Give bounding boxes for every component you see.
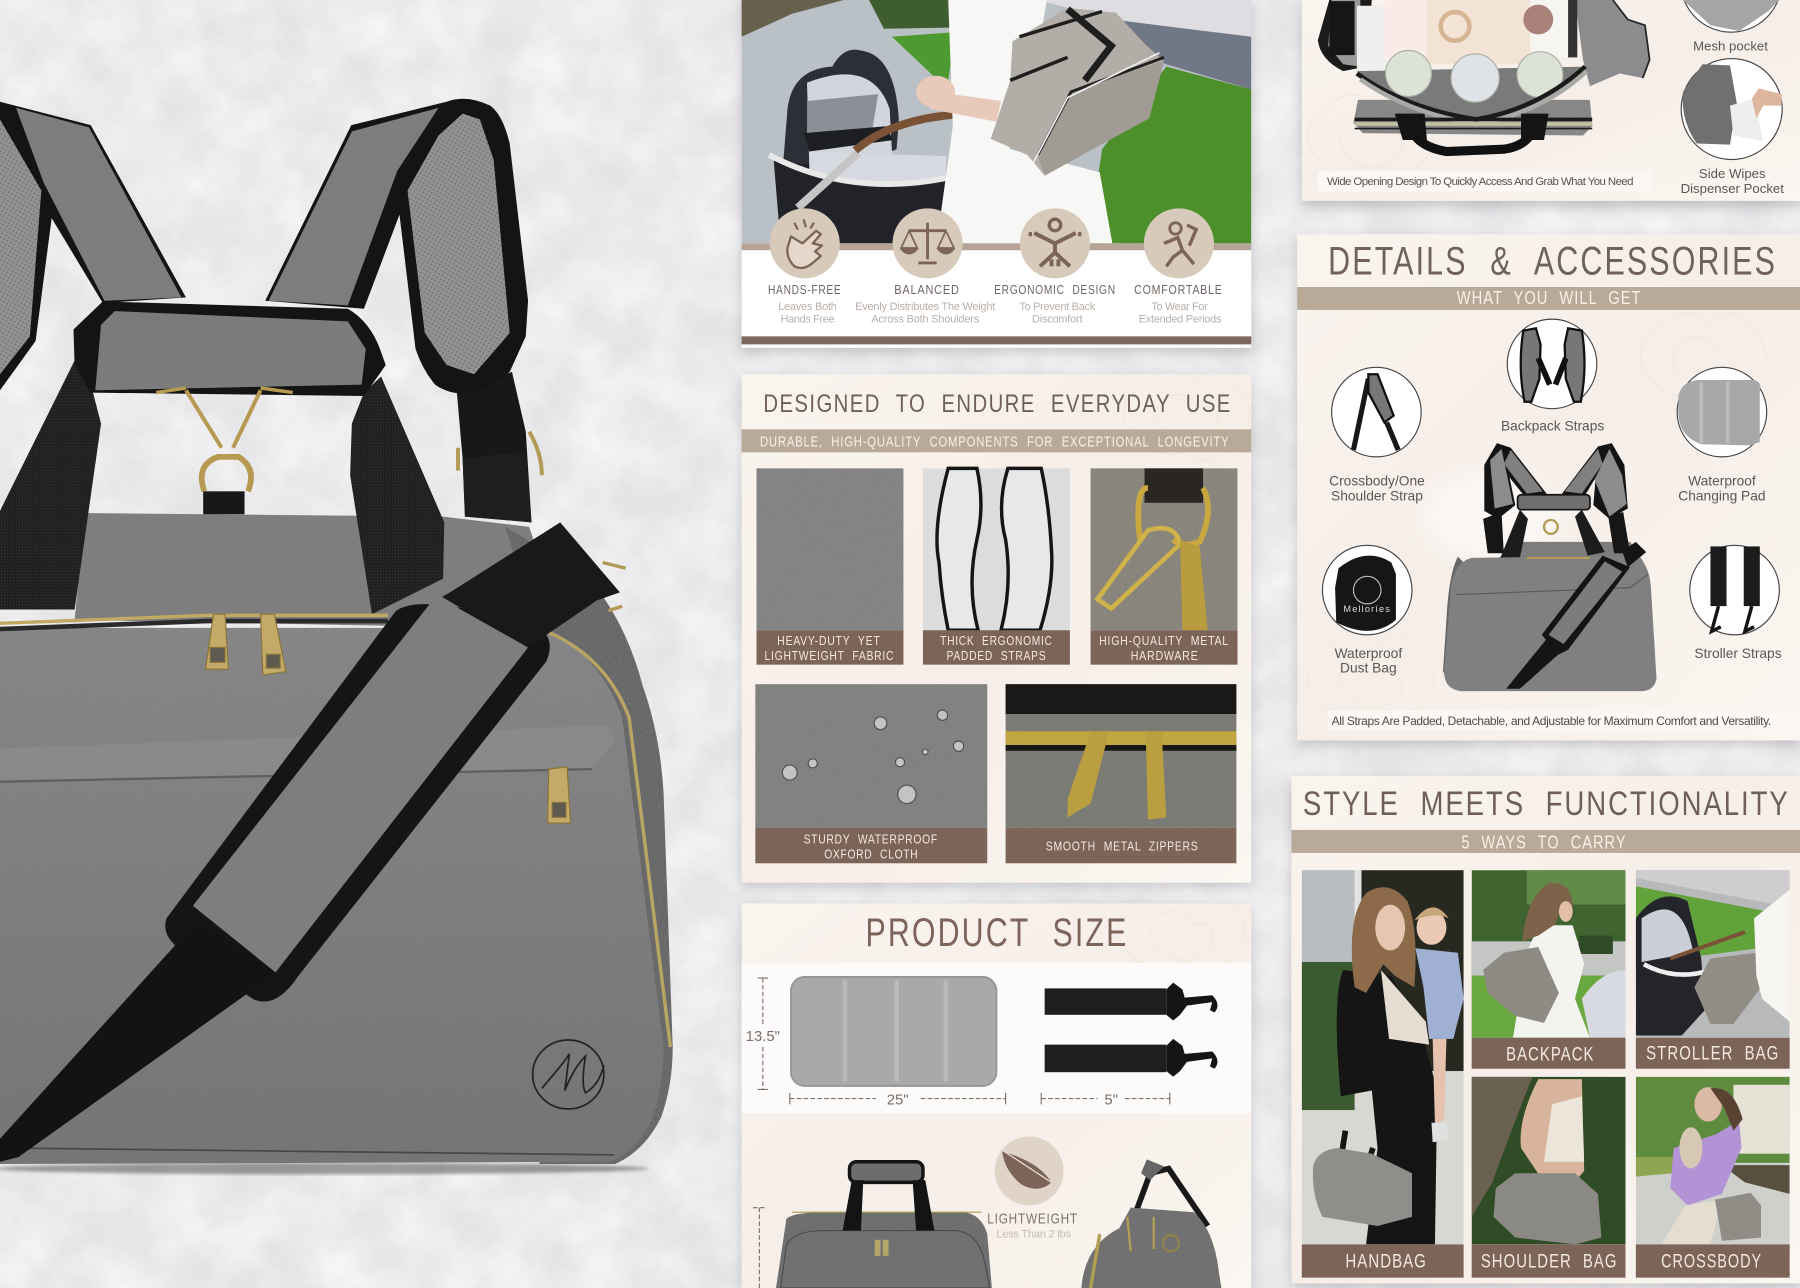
tile: backpack photo: BACKPACK <box>1506 1045 1595 1066</box>
dimension: height: 13.5" <box>746 1028 780 1045</box>
accessory: crossbody strap <box>1329 367 1425 504</box>
lightweight label: Less Than 2 lbs <box>996 1228 1072 1240</box>
stroller straps <box>1045 983 1217 1077</box>
note strip <box>1328 711 1790 730</box>
lightweight label <box>987 1211 1078 1240</box>
tile: waterproof cloth: STURDY WATERPROOF <box>804 832 938 847</box>
dimension: width: 25" <box>887 1091 909 1108</box>
heading: PRODUCT SIZE <box>866 910 1128 955</box>
webbing upper <box>442 522 620 647</box>
accessory: dust bag: Waterproof <box>1335 646 1402 661</box>
subheading band: WHAT YOU WILL GET <box>1457 287 1642 308</box>
feature: hands-free text: Hands Free <box>781 314 835 326</box>
mesh pocket circle <box>1681 0 1782 54</box>
changing pad <box>791 977 996 1086</box>
webbing lower <box>0 921 276 1162</box>
accessory: changing pad: Changing Pad <box>1678 489 1766 504</box>
panel: designed to endure <box>742 370 1251 886</box>
right shoulder strap <box>265 99 542 522</box>
ground shadow <box>0 1163 649 1174</box>
tile: metal hardware: HARDWARE <box>1131 648 1198 663</box>
tile: crossbody photo: CROSSBODY <box>1661 1251 1762 1272</box>
right handle strap <box>350 377 444 614</box>
zip <box>1527 557 1590 559</box>
zipper pulls <box>205 614 571 823</box>
accessory: stroller straps: Stroller Straps <box>1694 646 1782 661</box>
bag front view <box>776 1162 992 1288</box>
tile: waterproof cloth: OXFORD CLOTH <box>824 847 918 862</box>
tile: backpack photo <box>1472 870 1626 1069</box>
feature: balanced text: Across Both Shoulders <box>871 314 980 326</box>
dimension: strap length: 5" <box>1104 1091 1118 1108</box>
gold zipper top line <box>0 615 388 623</box>
tile: metal hardware: HIGH-QUALITY METAL <box>1099 633 1229 648</box>
tile: metal zippers <box>1006 684 1236 863</box>
tile: padded straps: THICK ERGONOMIC <box>940 633 1053 648</box>
dimension: width <box>790 1091 1006 1108</box>
webbing <box>1506 542 1646 689</box>
note strip: All Straps Are Padded, Detachable, and Adjustable for Maximum Comfort and Versatility. <box>1332 714 1771 728</box>
feature: hands-free text <box>768 283 841 326</box>
subheading band: 5 WAYS TO CARRY <box>1461 831 1627 852</box>
panel: wide opening interior <box>1302 0 1800 207</box>
pad outer <box>1542 556 1630 654</box>
top carry handle <box>73 301 386 396</box>
tile: crossbody photo <box>1636 1077 1790 1278</box>
tile: stroller bag photo <box>1636 870 1790 1069</box>
dark zipper shadow <box>0 621 388 629</box>
tile: handbag photo <box>1302 870 1464 1278</box>
rear side gusset <box>505 527 673 1164</box>
feature: comfortable text <box>1134 283 1223 326</box>
side gusset <box>1443 557 1464 689</box>
black tab <box>203 491 245 514</box>
wipes pocket circle <box>1681 59 1784 196</box>
feature: balanced text <box>855 283 995 326</box>
accessory: dust bag <box>1322 545 1412 676</box>
heading: DESIGNED TO ENDURE EVERYDAY USE <box>763 390 1232 418</box>
feature: balanced text: BALANCED <box>894 283 960 297</box>
left handle strap <box>0 360 101 610</box>
handle <box>1518 495 1590 510</box>
accessory: backpack straps: Backpack Straps <box>1501 418 1604 433</box>
feather badge <box>995 1136 1064 1205</box>
icon: comfortable <box>1144 208 1214 278</box>
dimension: bag height <box>753 1208 766 1288</box>
feature: ergonomic text <box>994 283 1116 326</box>
gold carabiner hardware <box>156 388 293 491</box>
accessory: dust bag: Dust Bag <box>1340 661 1397 676</box>
feature: balanced text: Evenly Distributes The Weight <box>855 301 995 313</box>
tile: fabric: LIGHTWEIGHT FABRIC <box>765 648 894 663</box>
panel: style meets functionality <box>1291 776 1800 1288</box>
subheading band: DURABLE, HIGH-QUALITY COMPONENTS FOR EXCEPTIONAL LONGEVITY <box>760 434 1229 451</box>
feature: comfortable text: To Wear For <box>1151 301 1208 313</box>
accessory: changing pad: Waterproof <box>1688 474 1756 489</box>
accessory: crossbody strap: Crossbody/One <box>1329 474 1425 489</box>
accessory: backpack straps <box>1501 319 1604 433</box>
back panel of bag <box>75 513 563 629</box>
subheading band <box>1291 830 1800 853</box>
bag side view <box>1081 1159 1221 1288</box>
left shoulder strap <box>0 102 186 390</box>
wipes pocket circle: Dispenser Pocket <box>1681 181 1784 196</box>
panel: product size <box>742 887 1251 1288</box>
feature: comfortable text: COMFORTABLE <box>1134 283 1223 297</box>
tile: padded straps: PADDED STRAPS <box>946 648 1046 663</box>
icon: ergonomic design <box>1020 208 1090 278</box>
flap seam <box>1456 574 1648 595</box>
taupe band <box>742 243 1251 250</box>
pocket shadow <box>0 769 592 782</box>
gold rivet <box>603 562 626 611</box>
feature: ergonomic text: To Prevent Back <box>1019 301 1096 313</box>
center product bag <box>1443 443 1656 691</box>
caption strip: Wide Opening Design To Quickly Access And Grab What You Need <box>1327 176 1634 188</box>
accessory: dust bag: Melloríes <box>1343 604 1391 614</box>
tile: shoulder bag photo <box>1472 1077 1626 1278</box>
icon: hands-free <box>770 208 840 278</box>
carabiner <box>1544 520 1558 534</box>
icon: balanced scales <box>893 208 963 278</box>
right edge gold zipper <box>546 631 670 1047</box>
feature: comfortable text: Extended Periods <box>1139 314 1222 326</box>
accessory: crossbody strap: Shoulder Strap <box>1331 489 1423 504</box>
open bag photo <box>1318 0 1650 152</box>
right shoulder loop <box>1561 443 1628 519</box>
tile: metal zippers: SMOOTH METAL ZIPPERS <box>1046 839 1198 854</box>
pocket seam <box>0 1148 614 1155</box>
front pocket flap <box>0 726 615 781</box>
subheading band <box>1297 287 1800 310</box>
lifestyle photo <box>742 0 1252 244</box>
tile: shoulder bag photo: SHOULDER BAG <box>1481 1251 1617 1272</box>
dimension: strap length <box>1041 1091 1170 1108</box>
lightweight label: LIGHTWEIGHT <box>987 1211 1078 1228</box>
tile: metal hardware <box>1091 468 1237 665</box>
dimension: height <box>746 978 780 1089</box>
crossbody pad fabric <box>193 596 528 972</box>
tile: padded straps <box>923 468 1070 665</box>
feature: ergonomic text: ERGONOMIC DESIGN <box>994 283 1116 297</box>
subheading band <box>742 429 1251 452</box>
white dimensions band <box>742 963 1251 1114</box>
feature: hands-free text: Leaves Both <box>778 301 837 313</box>
hero product: diaper bag <box>0 99 673 1174</box>
feature: hands-free text: HANDS-FREE <box>768 283 841 297</box>
body <box>1444 556 1656 691</box>
mesh pocket circle: Mesh pocket <box>1693 39 1768 54</box>
tile: waterproof cloth <box>755 684 987 863</box>
left shoulder loop <box>1484 443 1547 519</box>
lower straps <box>1483 512 1630 553</box>
accessory: changing pad <box>1677 367 1767 504</box>
back panel <box>1492 542 1644 562</box>
tile: handbag photo: HANDBAG <box>1345 1251 1427 1272</box>
panel: details and accessories <box>1297 234 1800 744</box>
handle straps <box>1500 510 1605 558</box>
feature: ergonomic text: Discomfort <box>1032 314 1083 326</box>
wipes pocket circle: Side Wipes <box>1699 166 1766 181</box>
pad fabric <box>1549 561 1622 644</box>
panel: hands-free lifestyle <box>742 0 1251 351</box>
logo mark <box>533 1040 604 1109</box>
accessory: stroller straps <box>1690 545 1782 661</box>
bag body <box>0 628 664 1164</box>
tile: fabric <box>757 468 903 665</box>
caption strip <box>1318 171 1652 192</box>
crossbody pad outer <box>165 604 550 1002</box>
tile: fabric: HEAVY-DUTY YET <box>777 633 880 648</box>
dark footer bar <box>742 336 1251 344</box>
